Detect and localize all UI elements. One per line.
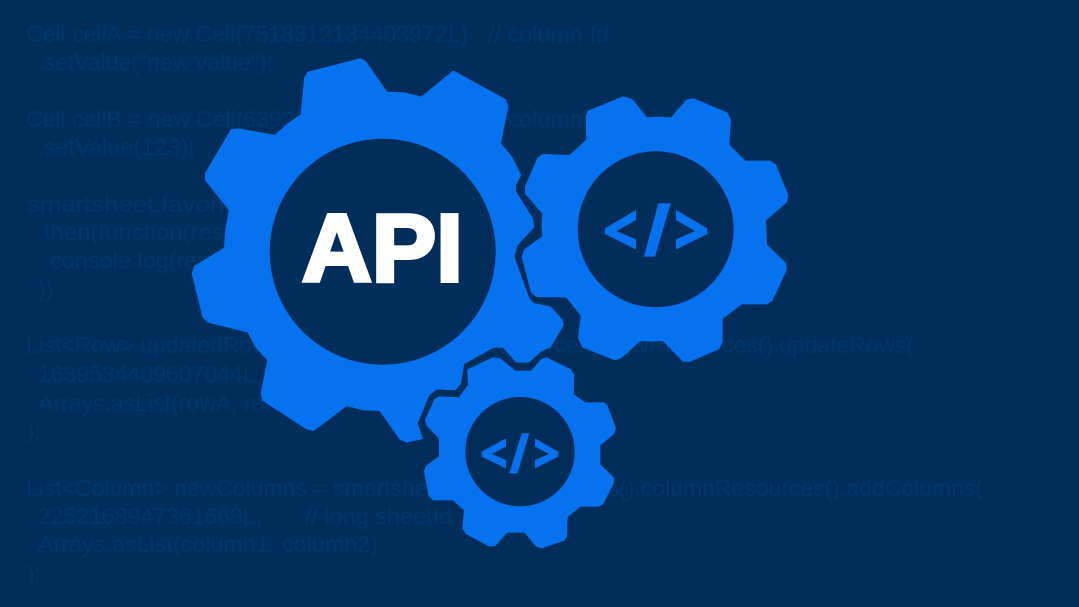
code comment 3: // column Id (488, 106, 609, 132)
API label: API (302, 195, 463, 302)
large API gear (193, 59, 563, 442)
code comment 14: // long sheetId (305, 503, 452, 529)
code comment 1: // column Id (488, 21, 609, 47)
code line 11: Arrays.asList(rowA, rowB) (38, 390, 304, 416)
code line 5: smartsheet.favorites.listFavorites(listOptions) (27, 191, 540, 217)
gear hub (465, 397, 575, 506)
code line 12: ); (27, 418, 40, 444)
icon: code brackets (482, 433, 558, 473)
code line 3: Cell cellB = new Cell(6392524734407812L) (26, 106, 468, 132)
gear body (193, 59, 563, 442)
right code gear (523, 97, 787, 361)
code line 6: .then(function(results) { (37, 219, 284, 245)
gear body (523, 97, 787, 361)
code line 14: 2252168947361668L, (38, 503, 262, 529)
code line 7: console.log(results); (50, 247, 260, 273)
code line 16: ); (27, 560, 40, 586)
gear body (425, 358, 615, 547)
code line 10: 1639534409607044L, (38, 361, 262, 387)
code line 13: List<Column> newColumns = smartsheet.sheetResources().columnResources().addColumns( (26, 475, 983, 501)
code line 9: List<Row> updatedRows = smartsheet.sheetResources().rowResources().updateRows( (26, 332, 914, 358)
small code gear (425, 358, 615, 547)
code line 2: .setValue("new value"); (37, 49, 273, 75)
code line 1: Cell cellA = new Cell(7518312134403972L) (26, 21, 468, 47)
gear hub (578, 151, 734, 307)
code line 15: Arrays.asList(column1, column2) (38, 531, 378, 557)
code line 4: .setValue(123); (37, 134, 195, 160)
gear hub (270, 139, 496, 365)
icon: code brackets (605, 203, 707, 257)
code line 8: }) (38, 276, 53, 302)
